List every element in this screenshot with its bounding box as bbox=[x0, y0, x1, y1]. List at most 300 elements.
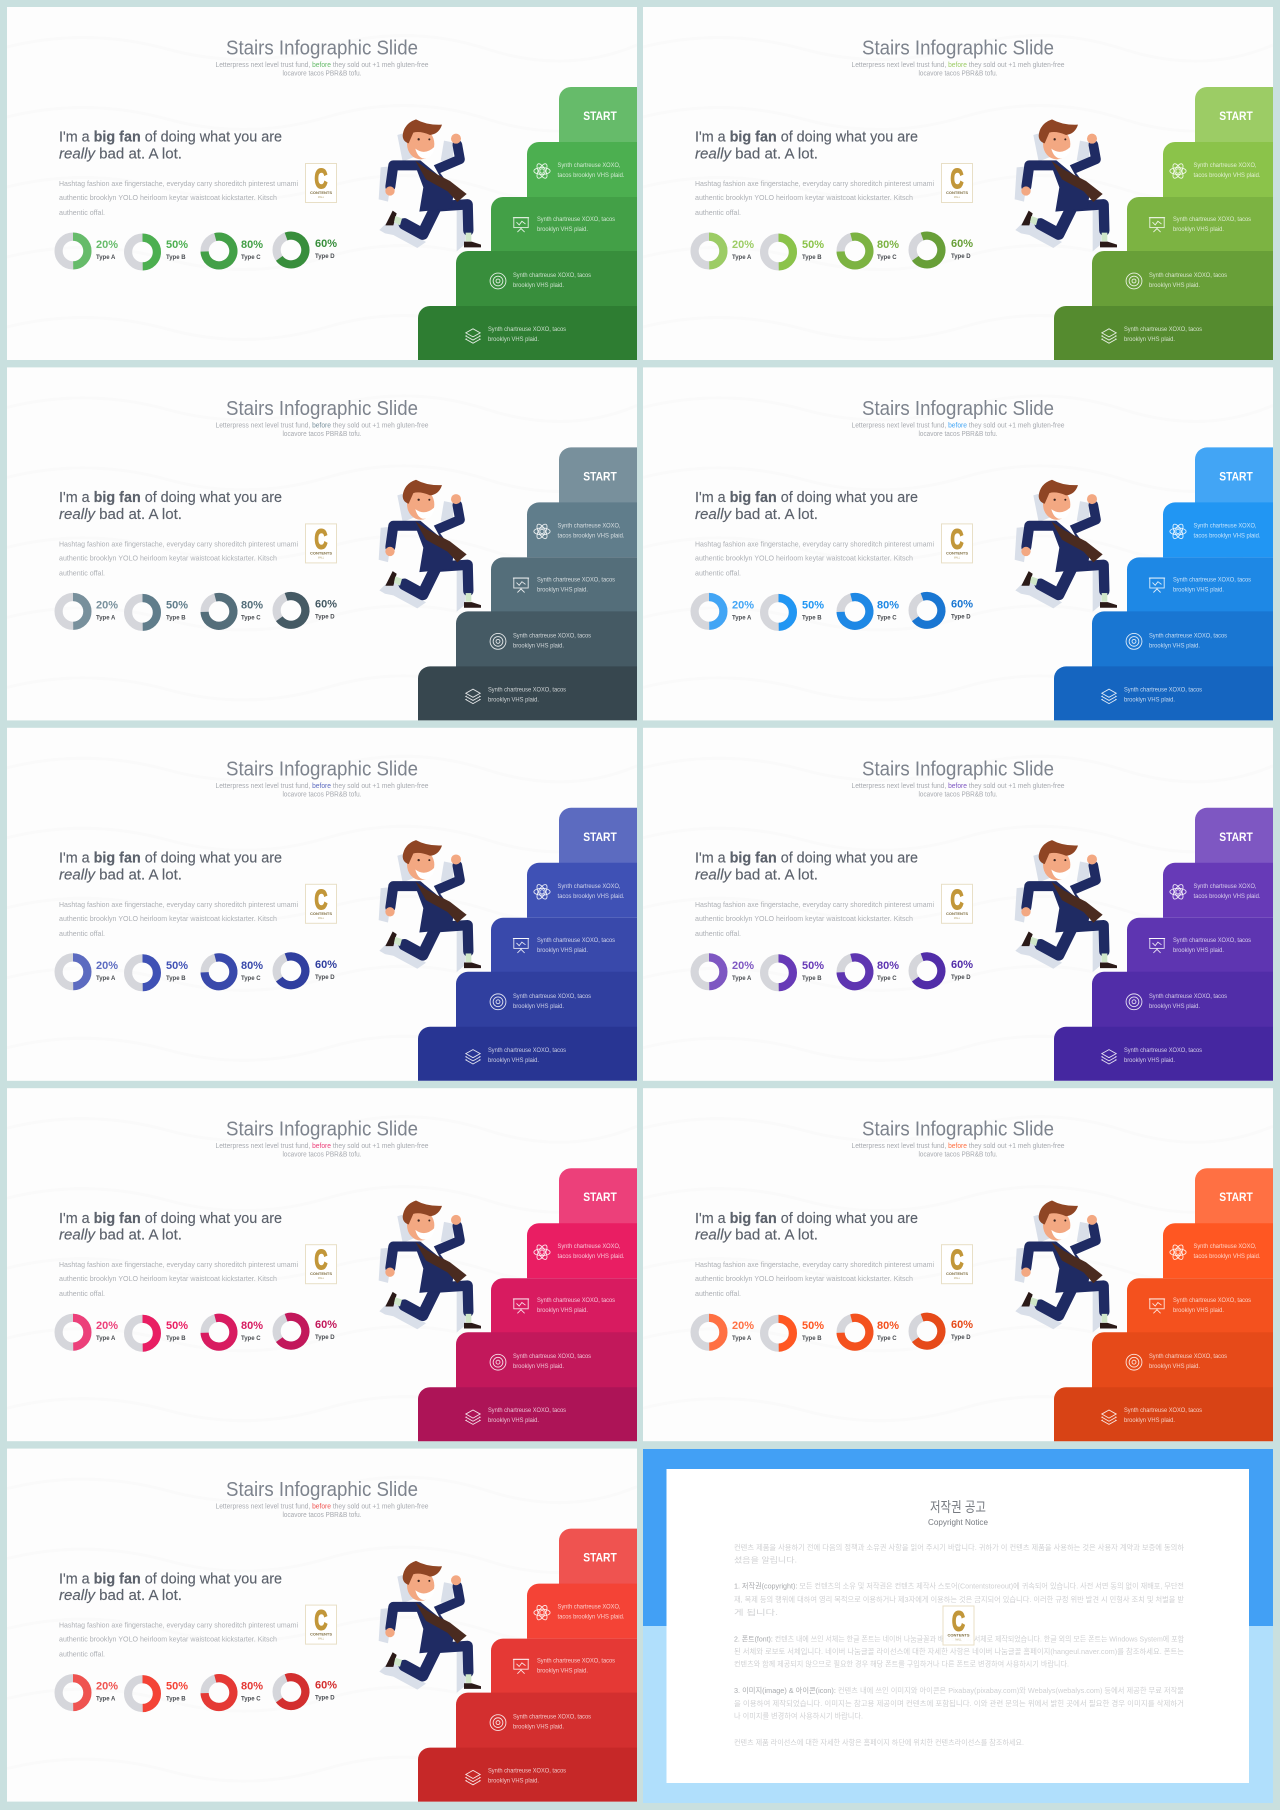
stair: step 5: brooklyn VHS plaid. bbox=[1124, 1417, 1175, 1424]
running businessman bbox=[379, 840, 481, 972]
logo: CONTENTS bbox=[948, 1632, 970, 1638]
donut: Type C: Type C bbox=[877, 976, 897, 982]
donut: Type B bbox=[764, 238, 824, 266]
stair: step 5 bbox=[1054, 666, 1273, 720]
stair: step 3: brooklyn VHS plaid. bbox=[1173, 586, 1224, 593]
stair: step 5: brooklyn VHS plaid. bbox=[488, 1778, 539, 1785]
donut: Type D: 60% bbox=[315, 1319, 337, 1331]
running businessman bbox=[379, 480, 481, 612]
logo: MALL bbox=[954, 1277, 961, 1280]
body text: authentic brooklyn YOLO heirloom keytar waistcoat kickstarter. Kitsch bbox=[59, 553, 277, 562]
stair: step 3: brooklyn VHS plaid. bbox=[537, 586, 588, 593]
body text bbox=[695, 179, 934, 217]
logo: C bbox=[951, 1244, 964, 1275]
donut: Type B: Type B bbox=[166, 615, 186, 621]
donut: Type B bbox=[764, 598, 824, 627]
donut: Type A: Type A bbox=[732, 1336, 752, 1342]
stair: step 4: brooklyn VHS plaid. bbox=[1149, 282, 1200, 289]
logo bbox=[306, 163, 336, 202]
stair: step 4 bbox=[456, 611, 637, 667]
stair: step 4 bbox=[1092, 1332, 1273, 1388]
logo: C bbox=[315, 523, 328, 554]
slide title: Letterpress next level trust fund, before they sold out +1 meh gluten-free bbox=[852, 1143, 1065, 1150]
stair: start bbox=[559, 808, 637, 864]
donut: Type A: Type A bbox=[732, 615, 752, 621]
heading bbox=[695, 850, 918, 883]
stair: step 4: brooklyn VHS plaid. bbox=[513, 282, 564, 289]
donut: Type A: 20% bbox=[96, 599, 118, 611]
donut: Type D: 60% bbox=[315, 238, 337, 250]
body text: authentic brooklyn YOLO heirloom keytar waistcoat kickstarter. Kitsch bbox=[59, 1635, 277, 1644]
donut: Type A: Type A bbox=[732, 255, 752, 261]
slide title: locavore tacos PBR&B tofu. bbox=[282, 70, 362, 78]
body text: authentic offal. bbox=[695, 208, 741, 217]
heading: I'm a big fan of doing what you are bbox=[695, 1210, 918, 1227]
body text: Hashtag fashion axe fingerstache, everyday carry shoreditch pinterest umami bbox=[59, 179, 298, 188]
notice section 3: 3. 이미지(image) & 아이콘(icon): 컨텐츠 내에 쓰인 이미지와 아이콘은 Pixabay(pixabay.com)와 Webalys(webalys.com) 등에서 제공한 무료 저작물 bbox=[734, 1685, 1184, 1695]
body text: Hashtag fashion axe fingerstache, everyday carry shoreditch pinterest umami bbox=[695, 539, 934, 548]
slide: light green bbox=[643, 7, 1273, 360]
donut: Type A: 20% bbox=[96, 1320, 118, 1332]
slide title: Stairs Infographic Slide bbox=[226, 1118, 418, 1141]
stair: step 5: brooklyn VHS plaid. bbox=[488, 1417, 539, 1424]
heading: really bad at. A lot. bbox=[59, 1587, 182, 1604]
slide title: Letterpress next level trust fund, before they sold out +1 meh gluten-free bbox=[216, 422, 429, 429]
stair: step 3: brooklyn VHS plaid. bbox=[537, 947, 588, 954]
donut: Type B: 50% bbox=[802, 599, 824, 611]
donut: Type B: 50% bbox=[802, 239, 824, 251]
running businessman bbox=[379, 1561, 481, 1693]
donut: Type A: 20% bbox=[732, 239, 754, 251]
body text bbox=[59, 539, 298, 577]
logo: C bbox=[952, 1606, 965, 1636]
donut: Type C bbox=[201, 233, 263, 269]
logo bbox=[942, 163, 972, 202]
heading: I'm a big fan of doing what you are bbox=[59, 129, 282, 146]
stair: step 2: tacos brooklyn VHS plaid. bbox=[558, 172, 625, 179]
donut: Type C: 80% bbox=[877, 960, 899, 972]
stair: step 3 bbox=[491, 1639, 637, 1694]
stair: step 3: Synth chartreuse XOXO, tacos bbox=[537, 216, 615, 223]
donut: Type C: 80% bbox=[877, 1320, 899, 1332]
body text: Hashtag fashion axe fingerstache, everyday carry shoreditch pinterest umami bbox=[59, 539, 298, 548]
donut: Type D bbox=[273, 952, 337, 989]
slide title bbox=[216, 36, 429, 78]
donut: Type A bbox=[695, 957, 754, 986]
running businessman bbox=[379, 119, 481, 251]
stair: step 4: Synth chartreuse XOXO, tacos bbox=[1149, 272, 1227, 279]
donut: Type B: 50% bbox=[166, 599, 188, 611]
donut: Type C: Type C bbox=[241, 1336, 261, 1342]
running businessman bbox=[1015, 840, 1117, 972]
stair: step 2: tacos brooklyn VHS plaid. bbox=[558, 532, 625, 539]
stair: step 4: Synth chartreuse XOXO, tacos bbox=[513, 993, 591, 1000]
logo: CONTENTS bbox=[946, 550, 968, 555]
body text: authentic brooklyn YOLO heirloom keytar waistcoat kickstarter. Kitsch bbox=[695, 193, 913, 202]
heading: I'm a big fan of doing what you are bbox=[59, 1570, 282, 1587]
stair: step 4: Synth chartreuse XOXO, tacos bbox=[513, 1714, 591, 1721]
logo: CONTENTS bbox=[310, 190, 332, 195]
heading: I'm a big fan of doing what you are bbox=[59, 849, 282, 866]
slide title: Stairs Infographic Slide bbox=[226, 36, 418, 60]
stair: step 3: brooklyn VHS plaid. bbox=[1173, 1307, 1224, 1314]
donut: Type A bbox=[59, 1318, 118, 1347]
stair: step 4 bbox=[456, 972, 637, 1028]
stair: step 3: Synth chartreuse XOXO, tacos bbox=[1173, 1297, 1251, 1304]
donut: Type B bbox=[764, 1319, 824, 1348]
stair: step 4: brooklyn VHS plaid. bbox=[513, 1724, 564, 1731]
donut: Type A bbox=[695, 237, 754, 265]
body text: authentic offal. bbox=[59, 208, 105, 217]
body text bbox=[59, 1260, 298, 1298]
stair: start: START bbox=[583, 111, 617, 123]
body text: authentic offal. bbox=[59, 929, 105, 938]
slide title: Stairs Infographic Slide bbox=[226, 397, 418, 420]
stair: step 5 bbox=[1054, 1027, 1273, 1081]
logo: C bbox=[951, 163, 964, 194]
heading bbox=[59, 489, 282, 523]
body text: authentic brooklyn YOLO heirloom keytar waistcoat kickstarter. Kitsch bbox=[59, 1274, 277, 1283]
stair: step 2: Synth chartreuse XOXO, bbox=[558, 522, 621, 529]
stair: step 3 bbox=[491, 1278, 637, 1333]
donut: Type D: Type D bbox=[315, 1335, 335, 1341]
heading: really bad at. A lot. bbox=[695, 866, 818, 883]
stair: step 5 bbox=[1054, 306, 1273, 360]
donut: Type A: Type A bbox=[96, 255, 116, 261]
stair: step 2: tacos brooklyn VHS plaid. bbox=[558, 1614, 625, 1621]
stair: step 2 bbox=[527, 863, 637, 918]
notice section 2: 컨텐츠와 함께 제공되지 않으므로 필요한 경우 해당 폰트를 구입하거나 다른 폰트로 변경하여 사용하시기 바랍니다. bbox=[734, 1658, 1069, 1668]
running businessman bbox=[379, 1201, 481, 1333]
running businessman bbox=[1015, 1201, 1117, 1333]
heading: I'm a big fan of doing what you are bbox=[695, 489, 918, 506]
stair: step 2 bbox=[527, 1223, 637, 1278]
stair: start bbox=[559, 1529, 637, 1585]
slide title bbox=[216, 1478, 429, 1519]
donut: Type D: Type D bbox=[315, 614, 335, 620]
stair: start bbox=[1195, 1168, 1273, 1224]
donut: Type C bbox=[837, 594, 899, 629]
logo: MALL bbox=[318, 556, 325, 559]
donut: Type C: Type C bbox=[241, 615, 261, 621]
donut: Type D: 60% bbox=[315, 959, 337, 971]
slide title: Letterpress next level trust fund, before they sold out +1 meh gluten-free bbox=[216, 783, 429, 790]
slide title: locavore tacos PBR&B tofu. bbox=[918, 70, 998, 78]
stair: step 4 bbox=[1092, 611, 1273, 667]
slide title: locavore tacos PBR&B tofu. bbox=[282, 791, 362, 798]
logo: MALL bbox=[318, 1277, 325, 1280]
heading: I'm a big fan of doing what you are bbox=[695, 849, 918, 866]
heading: really bad at. A lot. bbox=[59, 1227, 182, 1244]
notice section 3: 나 이미지를 변경하여 사용하시기 바랍니다. bbox=[734, 1710, 863, 1720]
slide title bbox=[216, 757, 429, 798]
donut: Type C: Type C bbox=[877, 255, 897, 261]
donut: Type A: 20% bbox=[96, 239, 118, 251]
stair: step 5 bbox=[1054, 1387, 1273, 1441]
body text bbox=[59, 179, 298, 217]
notice intro bbox=[734, 1542, 1184, 1564]
stair: step 2: Synth chartreuse XOXO, bbox=[1194, 1243, 1257, 1250]
logo: MALL bbox=[318, 1638, 325, 1641]
stair: step 4: Synth chartreuse XOXO, tacos bbox=[1149, 632, 1227, 639]
logo: MALL bbox=[954, 556, 961, 559]
donut: Type B: Type B bbox=[802, 255, 822, 261]
donut: Type D bbox=[909, 232, 973, 268]
slide title: Stairs Infographic Slide bbox=[226, 757, 418, 780]
stair: step 2: Synth chartreuse XOXO, bbox=[1194, 162, 1257, 169]
slide: green bbox=[7, 7, 637, 360]
stair: step 2: tacos brooklyn VHS plaid. bbox=[1194, 532, 1261, 539]
donut: Type A: 20% bbox=[732, 599, 754, 611]
donut: Type C bbox=[201, 1315, 263, 1350]
body text: authentic offal. bbox=[59, 1650, 105, 1659]
stair: step 3: brooklyn VHS plaid. bbox=[1173, 226, 1224, 233]
stair: step 3: brooklyn VHS plaid. bbox=[537, 1307, 588, 1314]
logo bbox=[942, 1244, 972, 1284]
slide title: Stairs Infographic Slide bbox=[862, 36, 1054, 60]
body text: Hashtag fashion axe fingerstache, everyday carry shoreditch pinterest umami bbox=[59, 1260, 298, 1269]
stair: step 3 bbox=[491, 197, 637, 252]
donut: Type B: Type B bbox=[802, 1336, 822, 1342]
slide title: Letterpress next level trust fund, before they sold out +1 meh gluten-free bbox=[852, 422, 1065, 429]
logo: C bbox=[315, 884, 328, 915]
donut: Type C: Type C bbox=[241, 1697, 261, 1703]
logo: CONTENTS bbox=[946, 1271, 968, 1276]
stair: step 5 bbox=[418, 1748, 637, 1802]
stair: step 3 bbox=[491, 557, 637, 612]
stair: step 4: Synth chartreuse XOXO, tacos bbox=[513, 632, 591, 639]
donut: Type B: 50% bbox=[166, 1681, 188, 1693]
donut: Type C: 80% bbox=[877, 599, 899, 611]
heading: I'm a big fan of doing what you are bbox=[59, 1210, 282, 1227]
body text: authentic offal. bbox=[695, 568, 741, 577]
stair: step 4: brooklyn VHS plaid. bbox=[513, 1003, 564, 1010]
donut: Type A bbox=[59, 957, 118, 986]
stair: step 2 bbox=[527, 142, 637, 197]
stair: step 3: Synth chartreuse XOXO, tacos bbox=[537, 937, 615, 944]
donut: Type B bbox=[128, 598, 188, 627]
donut: Type A: 20% bbox=[96, 960, 118, 972]
stair: step 3 bbox=[1127, 557, 1273, 612]
heading: I'm a big fan of doing what you are bbox=[695, 129, 918, 146]
stair: step 2: Synth chartreuse XOXO, bbox=[1194, 522, 1257, 529]
stair: step 5: brooklyn VHS plaid. bbox=[1124, 696, 1175, 703]
stair: step 2: tacos brooklyn VHS plaid. bbox=[1194, 172, 1261, 179]
donut: Type D: 60% bbox=[315, 598, 337, 610]
notice section 1: 재, 복제 등의 행위에 대하여 영리 목적으로 이용하거나 제3자에게 이용하는 것은 금지되어 있습니다. 이러한 규정 위반 발견 시 민형사 조치 및 처벌을 받 bbox=[734, 1594, 1184, 1604]
donut: Type D bbox=[273, 1673, 337, 1710]
donut: Type D: Type D bbox=[315, 1696, 335, 1702]
donut: Type B bbox=[128, 1679, 188, 1708]
stair: step 3: Synth chartreuse XOXO, tacos bbox=[537, 1658, 615, 1665]
stair: start: START bbox=[1219, 471, 1253, 483]
donut: Type B: 50% bbox=[802, 1320, 824, 1332]
slide title: locavore tacos PBR&B tofu. bbox=[282, 1512, 362, 1519]
donut: Type B: Type B bbox=[166, 1697, 186, 1703]
stair: step 4: Synth chartreuse XOXO, tacos bbox=[1149, 993, 1227, 1000]
donut: Type A: Type A bbox=[732, 976, 752, 982]
donut: Type D bbox=[273, 232, 337, 268]
slide title bbox=[216, 397, 429, 438]
notice title bbox=[928, 1499, 988, 1527]
slide title: locavore tacos PBR&B tofu. bbox=[918, 1152, 998, 1159]
stair: step 4 bbox=[1092, 251, 1273, 307]
stair: start: START bbox=[1219, 832, 1253, 844]
donut: Type D bbox=[273, 592, 337, 629]
slide: deep orange bbox=[643, 1088, 1273, 1441]
heading bbox=[695, 489, 918, 523]
stair: step 5: Synth chartreuse XOXO, tacos bbox=[488, 1407, 566, 1414]
logo: CONTENTS bbox=[946, 911, 968, 916]
donut: Type B bbox=[128, 1319, 188, 1348]
stair: step 5: brooklyn VHS plaid. bbox=[488, 336, 539, 343]
slide title bbox=[216, 1118, 429, 1159]
slide: blue bbox=[643, 367, 1273, 720]
heading: really bad at. A lot. bbox=[695, 506, 818, 523]
heading: really bad at. A lot. bbox=[59, 506, 182, 523]
body text: authentic offal. bbox=[695, 929, 741, 938]
donut: Type D: Type D bbox=[951, 975, 971, 981]
body text: authentic brooklyn YOLO heirloom keytar waistcoat kickstarter. Kitsch bbox=[695, 1274, 913, 1283]
stair: step 5: Synth chartreuse XOXO, tacos bbox=[488, 326, 566, 333]
donut: Type B: 50% bbox=[166, 239, 188, 251]
logo: MALL bbox=[318, 917, 325, 920]
donut: Type A bbox=[59, 1678, 118, 1707]
running businessman bbox=[1015, 480, 1117, 612]
donut: Type C: Type C bbox=[241, 255, 261, 261]
stair: start bbox=[559, 447, 637, 503]
panel: copyright notice bbox=[643, 1449, 1273, 1803]
stair: step 4 bbox=[456, 1332, 637, 1388]
donut: Type C: 80% bbox=[241, 1320, 263, 1332]
stair: step 2: tacos brooklyn VHS plaid. bbox=[1194, 1253, 1261, 1260]
slide: pink bbox=[7, 1088, 637, 1441]
stair: step 5: brooklyn VHS plaid. bbox=[1124, 1057, 1175, 1064]
logo: MALL bbox=[318, 196, 325, 199]
donut: Type D: Type D bbox=[951, 254, 971, 260]
donut: Type A: Type A bbox=[96, 1697, 116, 1703]
donut: Type B: Type B bbox=[166, 976, 186, 982]
slide: blue grey bbox=[7, 367, 637, 720]
logo: CONTENTS bbox=[310, 550, 332, 555]
heading: really bad at. A lot. bbox=[59, 866, 182, 883]
stair: step 2: Synth chartreuse XOXO, bbox=[558, 162, 621, 169]
body text: Hashtag fashion axe fingerstache, everyday carry shoreditch pinterest umami bbox=[695, 1260, 934, 1269]
slide title: locavore tacos PBR&B tofu. bbox=[282, 1152, 362, 1159]
slide title: locavore tacos PBR&B tofu. bbox=[918, 431, 998, 438]
logo bbox=[942, 884, 972, 923]
donut: Type C: Type C bbox=[877, 1336, 897, 1342]
body text: authentic brooklyn YOLO heirloom keytar waistcoat kickstarter. Kitsch bbox=[695, 553, 913, 562]
stair: step 5: Synth chartreuse XOXO, tacos bbox=[488, 686, 566, 693]
logo bbox=[306, 884, 336, 923]
donut: Type C bbox=[201, 594, 263, 629]
stair: step 2: Synth chartreuse XOXO, bbox=[558, 1243, 621, 1250]
donut: Type A: Type A bbox=[96, 976, 116, 982]
stair: start bbox=[559, 1168, 637, 1224]
donut: Type D: Type D bbox=[315, 975, 335, 981]
body text bbox=[59, 900, 298, 938]
stair: step 4 bbox=[456, 251, 637, 307]
stair: step 3: Synth chartreuse XOXO, tacos bbox=[537, 1297, 615, 1304]
slide title: Stairs Infographic Slide bbox=[862, 1118, 1054, 1141]
stair: start: START bbox=[1219, 1192, 1253, 1204]
stair: step 2 bbox=[527, 1584, 637, 1639]
stair: step 4: brooklyn VHS plaid. bbox=[513, 1363, 564, 1370]
donut: Type C: 80% bbox=[877, 239, 899, 251]
stair: step 3 bbox=[491, 918, 637, 973]
body text bbox=[695, 539, 934, 577]
stair: step 3: brooklyn VHS plaid. bbox=[1173, 947, 1224, 954]
slide title bbox=[852, 1118, 1065, 1159]
slide: red bbox=[7, 1449, 637, 1802]
donut: Type C: Type C bbox=[241, 976, 261, 982]
stair: step 5 bbox=[418, 666, 637, 720]
stair: step 2 bbox=[1163, 1223, 1273, 1278]
donut: Type B: 50% bbox=[166, 960, 188, 972]
stair: start: START bbox=[583, 471, 617, 483]
donut: Type B bbox=[764, 958, 824, 987]
donut: Type A bbox=[59, 237, 118, 265]
body text: Hashtag fashion axe fingerstache, everyday carry shoreditch pinterest umami bbox=[695, 900, 934, 909]
notice section 3 bbox=[734, 1685, 1184, 1720]
stair: step 2: Synth chartreuse XOXO, bbox=[1194, 883, 1257, 890]
stair: step 2 bbox=[1163, 142, 1273, 197]
slide title: Letterpress next level trust fund, before they sold out +1 meh gluten-free bbox=[216, 1504, 429, 1511]
stair: step 2 bbox=[1163, 863, 1273, 918]
donut: Type C bbox=[837, 233, 899, 269]
logo: CONTENTS bbox=[946, 190, 968, 195]
logo: C bbox=[315, 1605, 328, 1636]
stair: step 5: brooklyn VHS plaid. bbox=[488, 696, 539, 703]
donut: Type B: Type B bbox=[166, 1336, 186, 1342]
donut: Type A: 20% bbox=[96, 1681, 118, 1693]
donut: Type D bbox=[909, 1313, 973, 1350]
stair: step 3: Synth chartreuse XOXO, tacos bbox=[1173, 216, 1251, 223]
stair: step 5: Synth chartreuse XOXO, tacos bbox=[1124, 1047, 1202, 1054]
donut: Type C: 80% bbox=[241, 960, 263, 972]
notice section 1: 게 됩니다. bbox=[734, 1607, 778, 1617]
donut: Type A: 20% bbox=[732, 960, 754, 972]
donut: Type A bbox=[695, 1318, 754, 1347]
stair: start bbox=[1195, 447, 1273, 503]
donut: Type D bbox=[909, 592, 973, 629]
donut: Type A: 20% bbox=[732, 1320, 754, 1332]
donut: Type C bbox=[837, 1315, 899, 1350]
logo: MALL bbox=[954, 196, 961, 199]
logo bbox=[306, 1244, 336, 1284]
logo bbox=[306, 523, 336, 563]
stair: step 3: Synth chartreuse XOXO, tacos bbox=[1173, 937, 1251, 944]
logo: C bbox=[951, 523, 964, 554]
body text: authentic offal. bbox=[695, 1289, 741, 1298]
stair: step 3: Synth chartreuse XOXO, tacos bbox=[1173, 576, 1251, 583]
slide title: Letterpress next level trust fund, before they sold out +1 meh gluten-free bbox=[216, 62, 429, 69]
slide title: locavore tacos PBR&B tofu. bbox=[918, 791, 998, 798]
stair: start: START bbox=[583, 1553, 617, 1565]
stair: step 2: tacos brooklyn VHS plaid. bbox=[1194, 893, 1261, 900]
notice intro: 컨텐츠 제품을 사용하기 전에 다음의 정책과 소유권 사항을 읽어 주시기 바랍니다. 귀하가 이 컨텐츠 제품을 사용하는 것은 사용자 계약과 보증에 동의하 bbox=[734, 1542, 1184, 1552]
notice section 2 bbox=[734, 1634, 1184, 1668]
donut: Type C bbox=[201, 1675, 263, 1710]
donut: Type B: Type B bbox=[166, 255, 186, 261]
stair: step 4 bbox=[1092, 972, 1273, 1028]
logo: CONTENTS bbox=[310, 911, 332, 916]
stair: step 5: Synth chartreuse XOXO, tacos bbox=[488, 1768, 566, 1775]
notice title: Copyright Notice bbox=[928, 1517, 988, 1527]
body text bbox=[695, 900, 934, 938]
body text bbox=[695, 1260, 934, 1298]
